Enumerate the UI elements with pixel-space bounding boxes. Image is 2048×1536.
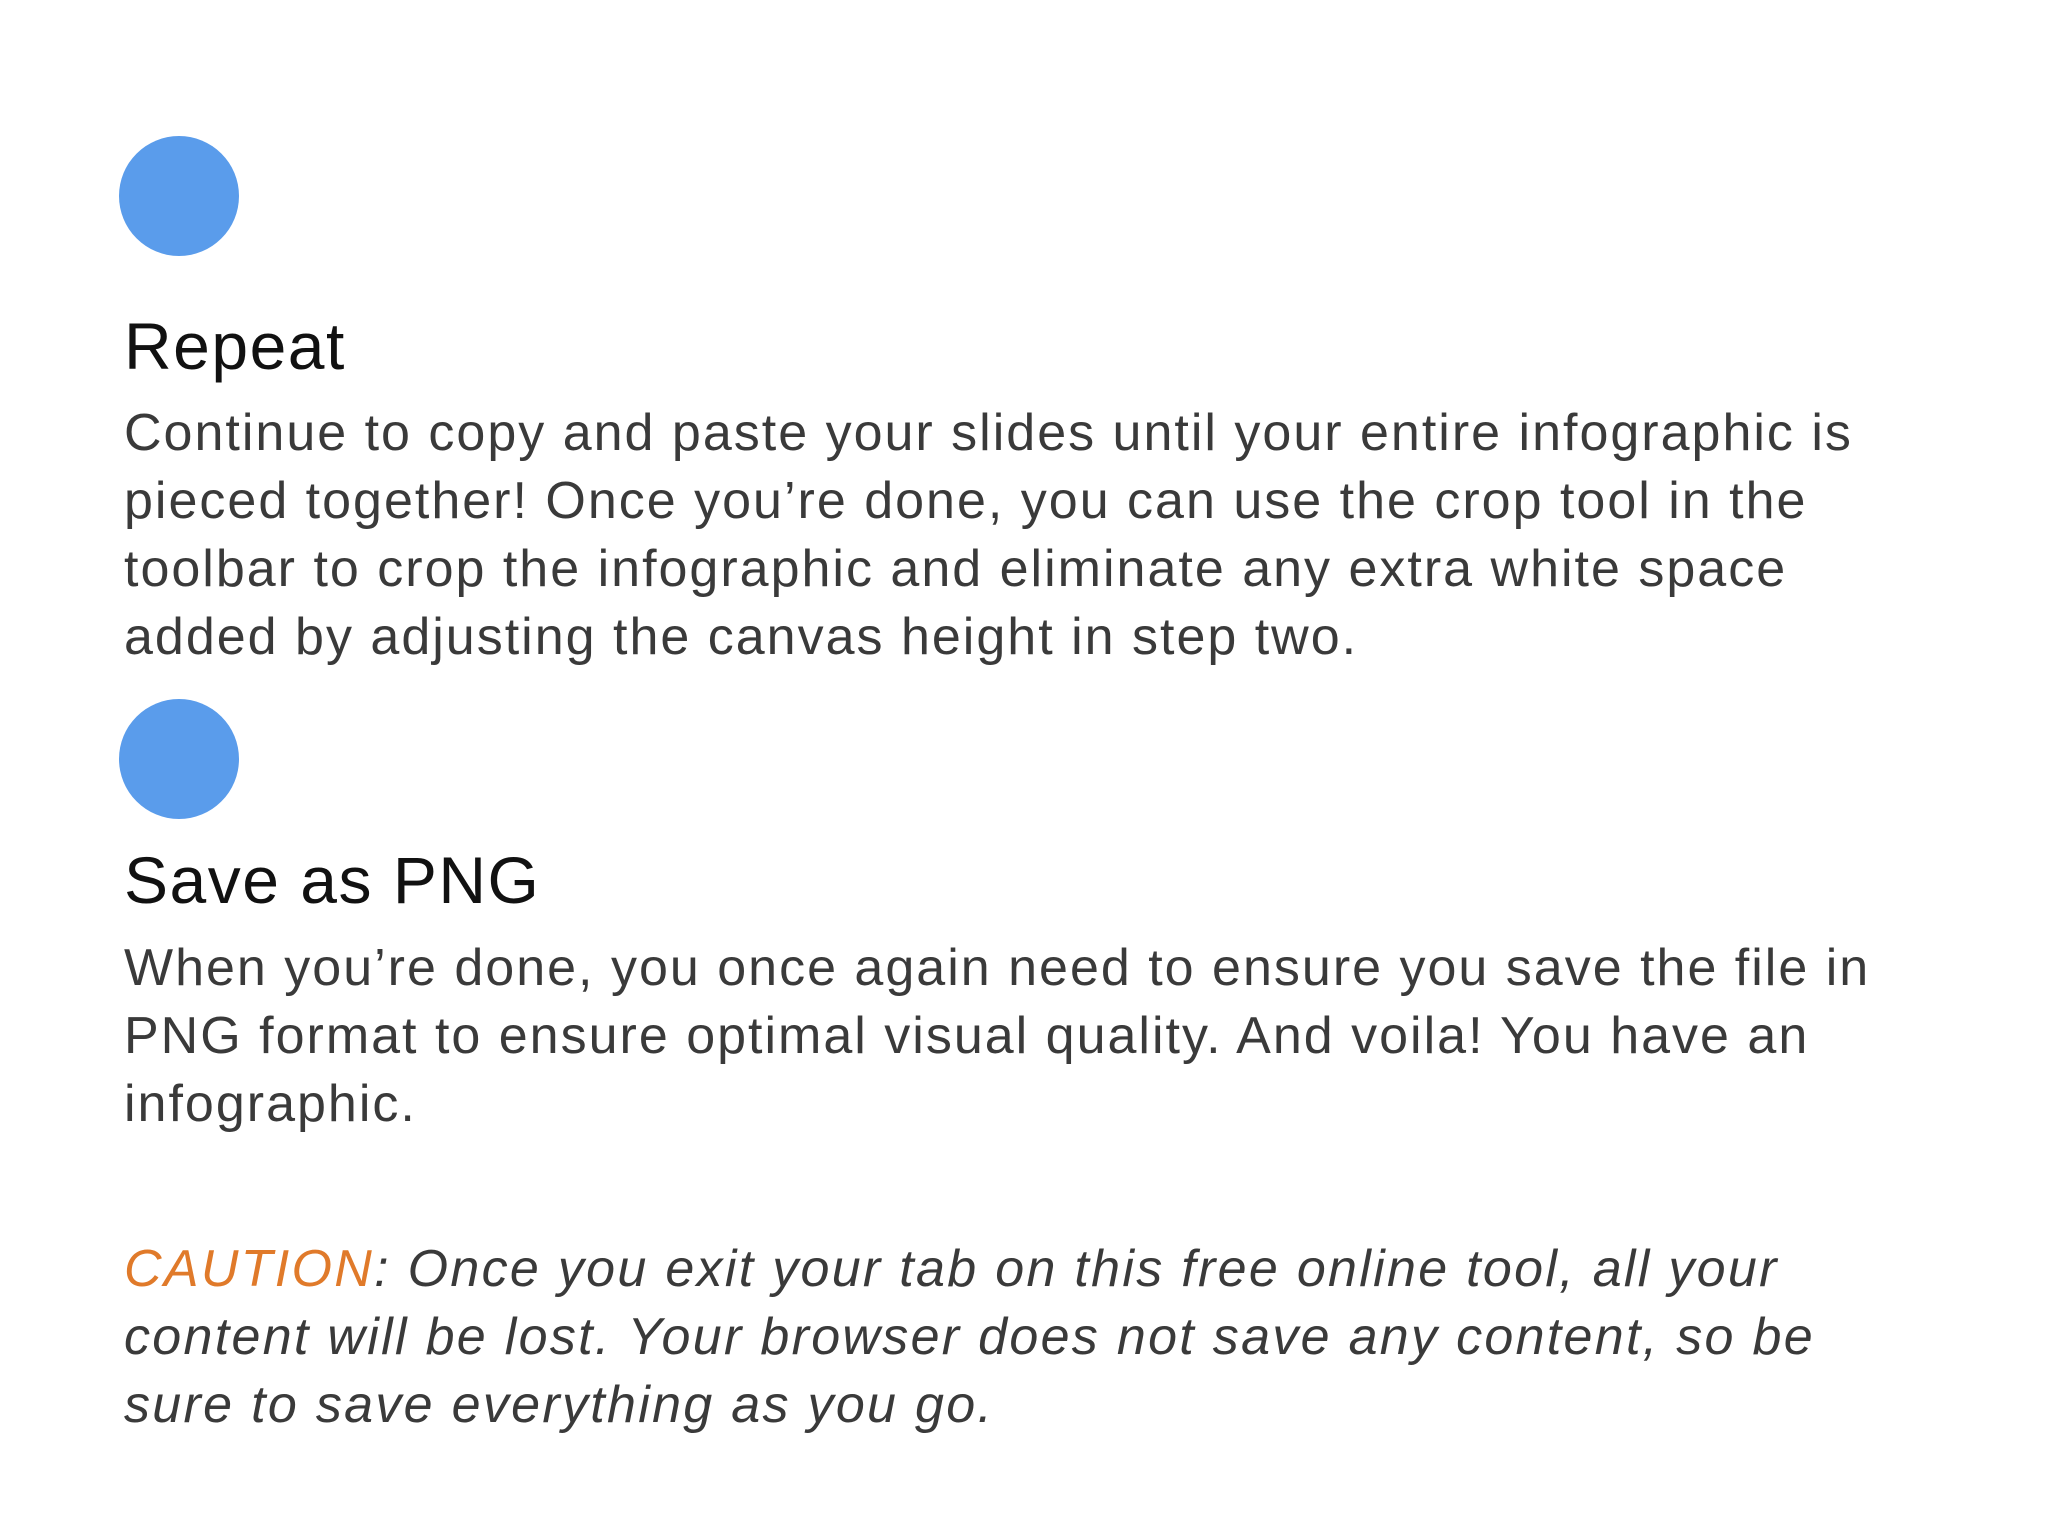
- callout: caution note: content will be lost. Your browser does not save any content, so be: [124, 1308, 1815, 1366]
- text block: save description: [124, 939, 1870, 1133]
- icon: circle step repeat: [119, 136, 239, 256]
- heading: Repeat: Repeat: [124, 309, 346, 383]
- heading: Save as PNG: Save as PNG: [124, 843, 540, 917]
- callout: caution note: CAUTION: Once you exit your tab on this free online tool, all your: [124, 1240, 1779, 1298]
- text block: repeat description: toolbar to crop the infographic and eliminate any extra white space: [124, 540, 1787, 598]
- text block: save description: When you’re done, you once again need to ensure you save the file in: [124, 939, 1870, 997]
- text block: repeat description: Continue to copy and paste your slides until your entire infographic is: [124, 404, 1853, 462]
- text block: repeat description: added by adjusting the canvas height in step two.: [124, 608, 1358, 666]
- callout: caution note: [124, 1240, 1815, 1434]
- text block: save description: PNG format to ensure optimal visual quality. And voila! You have an: [124, 1007, 1809, 1065]
- text block: save description: infographic.: [124, 1075, 417, 1133]
- icon: circle step save: [119, 699, 239, 819]
- text block: repeat description: [124, 404, 1853, 666]
- callout: caution note: sure to save everything as you go.: [124, 1376, 994, 1434]
- text block: repeat description: pieced together! Once you’re done, you can use the crop tool in the: [124, 472, 1807, 530]
